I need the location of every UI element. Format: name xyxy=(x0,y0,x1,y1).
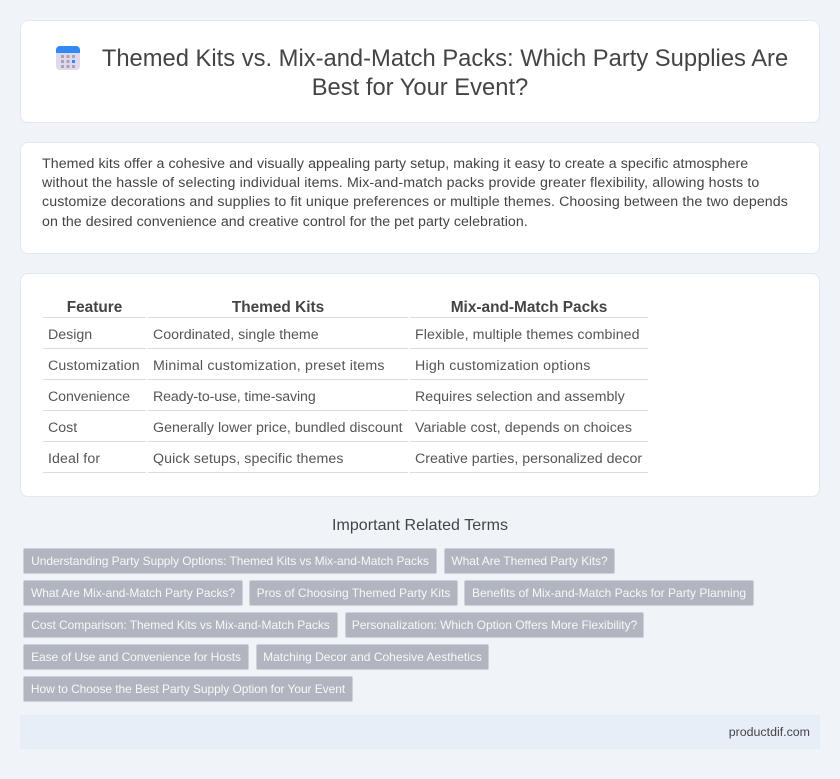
row: design: Design xyxy=(48,327,92,343)
intro text: on the desired convenience and creative control for the pet party celebration. xyxy=(42,214,528,230)
tag: Understanding Party Supply Options: Themed Kits vs Mix-and-Match Packs xyxy=(31,554,429,568)
icon: calendar xyxy=(56,46,80,70)
tag xyxy=(249,580,458,606)
row: customization: Customization xyxy=(48,358,140,374)
tag xyxy=(345,612,644,638)
panel: comparison table: Ready-to-use, time-saving xyxy=(153,389,316,405)
table header: mix-and-match packs: Mix-and-Match Packs xyxy=(451,299,607,316)
related terms tags xyxy=(23,548,754,702)
tag xyxy=(464,580,754,606)
panel: comparison table xyxy=(20,273,820,497)
tag: Ease of Use and Convenience for Hosts xyxy=(31,650,241,664)
tag: Cost Comparison: Themed Kits vs Mix-and-Match Packs xyxy=(31,618,330,632)
table header: themed kits: Themed Kits xyxy=(232,299,324,316)
row: ideal for: Ideal for xyxy=(48,451,100,467)
tag xyxy=(23,580,243,606)
panel: comparison table: Requires selection and assembly xyxy=(415,389,625,405)
tag: Benefits of Mix-and-Match Packs for Party Planning xyxy=(472,586,746,600)
title xyxy=(102,45,788,101)
panel: comparison table: Coordinated, single theme xyxy=(153,327,319,343)
panel: comparison table: High customization options xyxy=(415,358,591,374)
tag xyxy=(23,612,338,638)
intro text: without the hassle of selecting individual items. Mix-and-match packs provide greater flexibility, allowing hosts to xyxy=(42,175,759,191)
title: Best for Your Event? xyxy=(312,74,528,101)
row: cost: Cost xyxy=(48,420,77,436)
title: Themed Kits vs. Mix-and-Match Packs: Which Party Supplies Are xyxy=(102,45,788,72)
row: convenience: Convenience xyxy=(48,389,130,405)
tag: Matching Decor and Cohesive Aesthetics xyxy=(263,650,482,664)
tag: What Are Themed Party Kits? xyxy=(451,554,608,568)
header card xyxy=(20,20,820,123)
tag: Pros of Choosing Themed Party Kits xyxy=(257,586,450,600)
footer bar xyxy=(20,715,820,749)
tag xyxy=(23,548,437,574)
heading: important related terms: Important Related Terms xyxy=(332,517,508,534)
panel: comparison table: Variable cost, depends on choices xyxy=(415,420,632,436)
panel: comparison table: Creative parties, personalized decor xyxy=(415,451,642,467)
intro text: customize decorations and supplies to fit unique preferences or multiple themes. Choosing between the two depends xyxy=(42,194,788,210)
panel: comparison table: Flexible, multiple themes combined xyxy=(415,327,640,343)
tag: How to Choose the Best Party Supply Option for Your Event xyxy=(31,682,345,696)
panel: intro xyxy=(20,142,820,254)
tag xyxy=(23,676,353,702)
intro text xyxy=(42,156,788,230)
footer source: productdif.com xyxy=(729,725,810,739)
panel: comparison table: Minimal customization, preset items xyxy=(153,358,385,374)
tag xyxy=(256,644,489,670)
panel: comparison table: Quick setups, specific themes xyxy=(153,451,344,467)
panel: comparison table: Generally lower price, bundled discount xyxy=(153,420,403,436)
tag xyxy=(444,548,615,574)
table header: feature: Feature xyxy=(67,299,122,316)
tag: What Are Mix-and-Match Party Packs? xyxy=(31,586,235,600)
intro text: Themed kits offer a cohesive and visually appealing party setup, making it easy to create a specific atmosphere xyxy=(42,156,748,172)
tag: Personalization: Which Option Offers More Flexibility? xyxy=(352,618,637,632)
tag xyxy=(23,644,249,670)
